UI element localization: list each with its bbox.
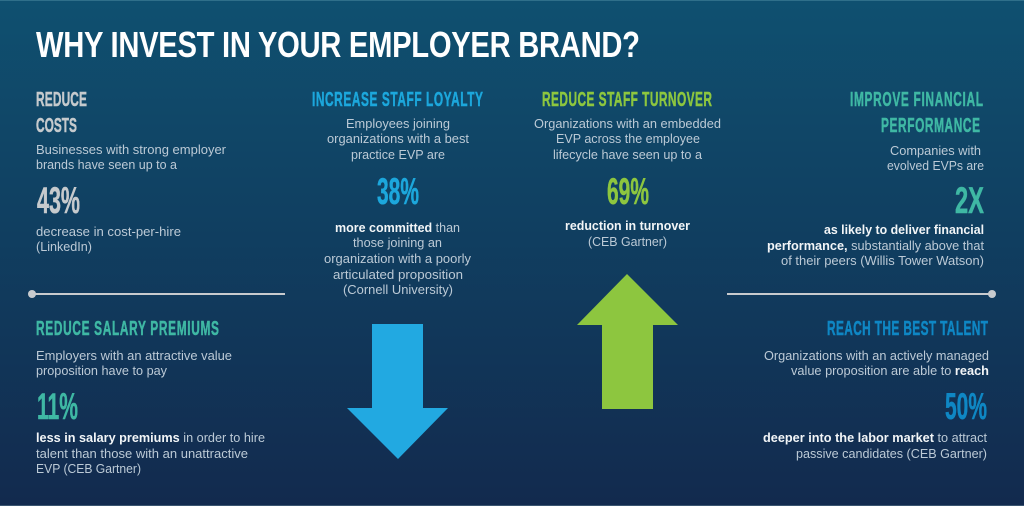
text: turnover intro: Organizations with an embedded	[534, 117, 721, 131]
stat: 38%: 38%	[377, 171, 419, 212]
heading: reach the best talent: REACH THE BEST TALENT	[827, 317, 989, 340]
heading: improve financial performance	[850, 88, 983, 137]
text: talent intro: Organizations with an actively managed	[764, 349, 989, 363]
heading: improve financial performance: IMPROVE FINANCIAL	[850, 88, 983, 111]
text: financial detail: of their peers (Willis Tower Watson)	[781, 254, 984, 268]
text: reduce costs detail: (LinkedIn)	[36, 240, 92, 254]
text: talent detail	[763, 431, 988, 461]
stat: 43%: 43%	[37, 180, 80, 221]
text: loyalty detail: more committed than	[335, 221, 460, 235]
text: talent intro: value proposition are able to reach	[791, 364, 989, 378]
title: WHY INVEST IN YOUR EMPLOYER BRAND?	[36, 25, 640, 66]
text: salary intro	[36, 349, 232, 378]
text: turnover detail: (CEB Gartner)	[588, 235, 667, 249]
text: salary intro: proposition have to pay	[36, 364, 168, 378]
text: loyalty detail: (Cornell University)	[343, 283, 453, 297]
text: talent intro	[764, 349, 989, 378]
stat: 69%: 69%	[607, 171, 649, 212]
divider: right	[727, 290, 996, 298]
text: talent detail: passive candidates (CEB Gartner)	[796, 447, 987, 461]
text: turnover intro	[534, 117, 721, 162]
text: financial detail	[767, 223, 984, 268]
text: loyalty intro: Employees joining	[346, 117, 450, 131]
text: reduce costs intro: brands have seen up to a	[36, 158, 177, 172]
text: reduce costs intro: Businesses with strong employer	[36, 143, 226, 157]
heading: reduce costs: REDUCE	[36, 88, 87, 111]
text: turnover intro: lifecycle have seen up to a	[553, 148, 702, 162]
text: salary detail: less in salary premiums in order to hire	[36, 431, 265, 445]
heading: reduce salary premiums: REDUCE SALARY PREMIUMS	[36, 317, 219, 340]
text: loyalty detail: those joining an	[353, 236, 442, 250]
text: reduce costs detail: decrease in cost-per-hire	[36, 225, 181, 239]
text: financial intro	[887, 144, 984, 173]
panel: reduce costs	[36, 88, 226, 254]
text: loyalty detail	[324, 221, 472, 297]
panel: improve financial performance	[767, 88, 984, 268]
panel: reduce staff turnover	[534, 88, 721, 249]
text: loyalty intro	[327, 117, 469, 162]
panel: reduce salary premiums	[36, 317, 265, 476]
panel: reach the best talent	[763, 317, 989, 461]
text: turnover detail: reduction in turnover	[565, 219, 690, 233]
text: financial intro: evolved EVPs are	[887, 159, 984, 173]
arrow: down	[347, 324, 448, 459]
stat: 2X: 2X	[955, 180, 984, 221]
text: salary detail: talent than those with an unattractive	[36, 447, 248, 461]
text: loyalty intro: organizations with a best	[327, 132, 469, 146]
text: talent detail: deeper into the labor market to attract	[763, 431, 988, 445]
text: financial intro: Companies with	[890, 144, 981, 158]
text: loyalty intro: practice EVP are	[351, 148, 445, 162]
panel: increase staff loyalty	[312, 88, 483, 297]
heading: reduce costs	[36, 88, 87, 137]
text: turnover detail	[565, 219, 690, 249]
text: salary detail: EVP (CEB Gartner)	[36, 462, 141, 476]
text: financial detail: performance, substantially above that	[767, 239, 984, 253]
text: reduce costs detail	[36, 225, 181, 254]
text: salary detail	[36, 431, 265, 476]
text: financial detail: as likely to deliver financial	[824, 223, 984, 237]
divider: left	[28, 290, 285, 298]
stat: 11%: 11%	[37, 386, 78, 427]
arrow: up	[577, 274, 678, 409]
heading: reduce staff turnover: REDUCE STAFF TURNOVER	[542, 88, 712, 111]
text: loyalty detail: organization with a poorly	[324, 252, 472, 266]
text: loyalty detail: articulated proposition	[333, 268, 463, 282]
text: salary intro: Employers with an attractive value	[36, 349, 232, 363]
heading: increase staff loyalty: INCREASE STAFF LOYALTY	[312, 88, 483, 111]
heading: reduce costs: COSTS	[36, 114, 77, 137]
heading: improve financial performance: PERFORMANCE	[881, 114, 980, 137]
text: reduce costs intro	[36, 143, 226, 172]
stat: 50%: 50%	[945, 386, 987, 427]
text: turnover intro: EVP across the employee	[556, 132, 700, 146]
